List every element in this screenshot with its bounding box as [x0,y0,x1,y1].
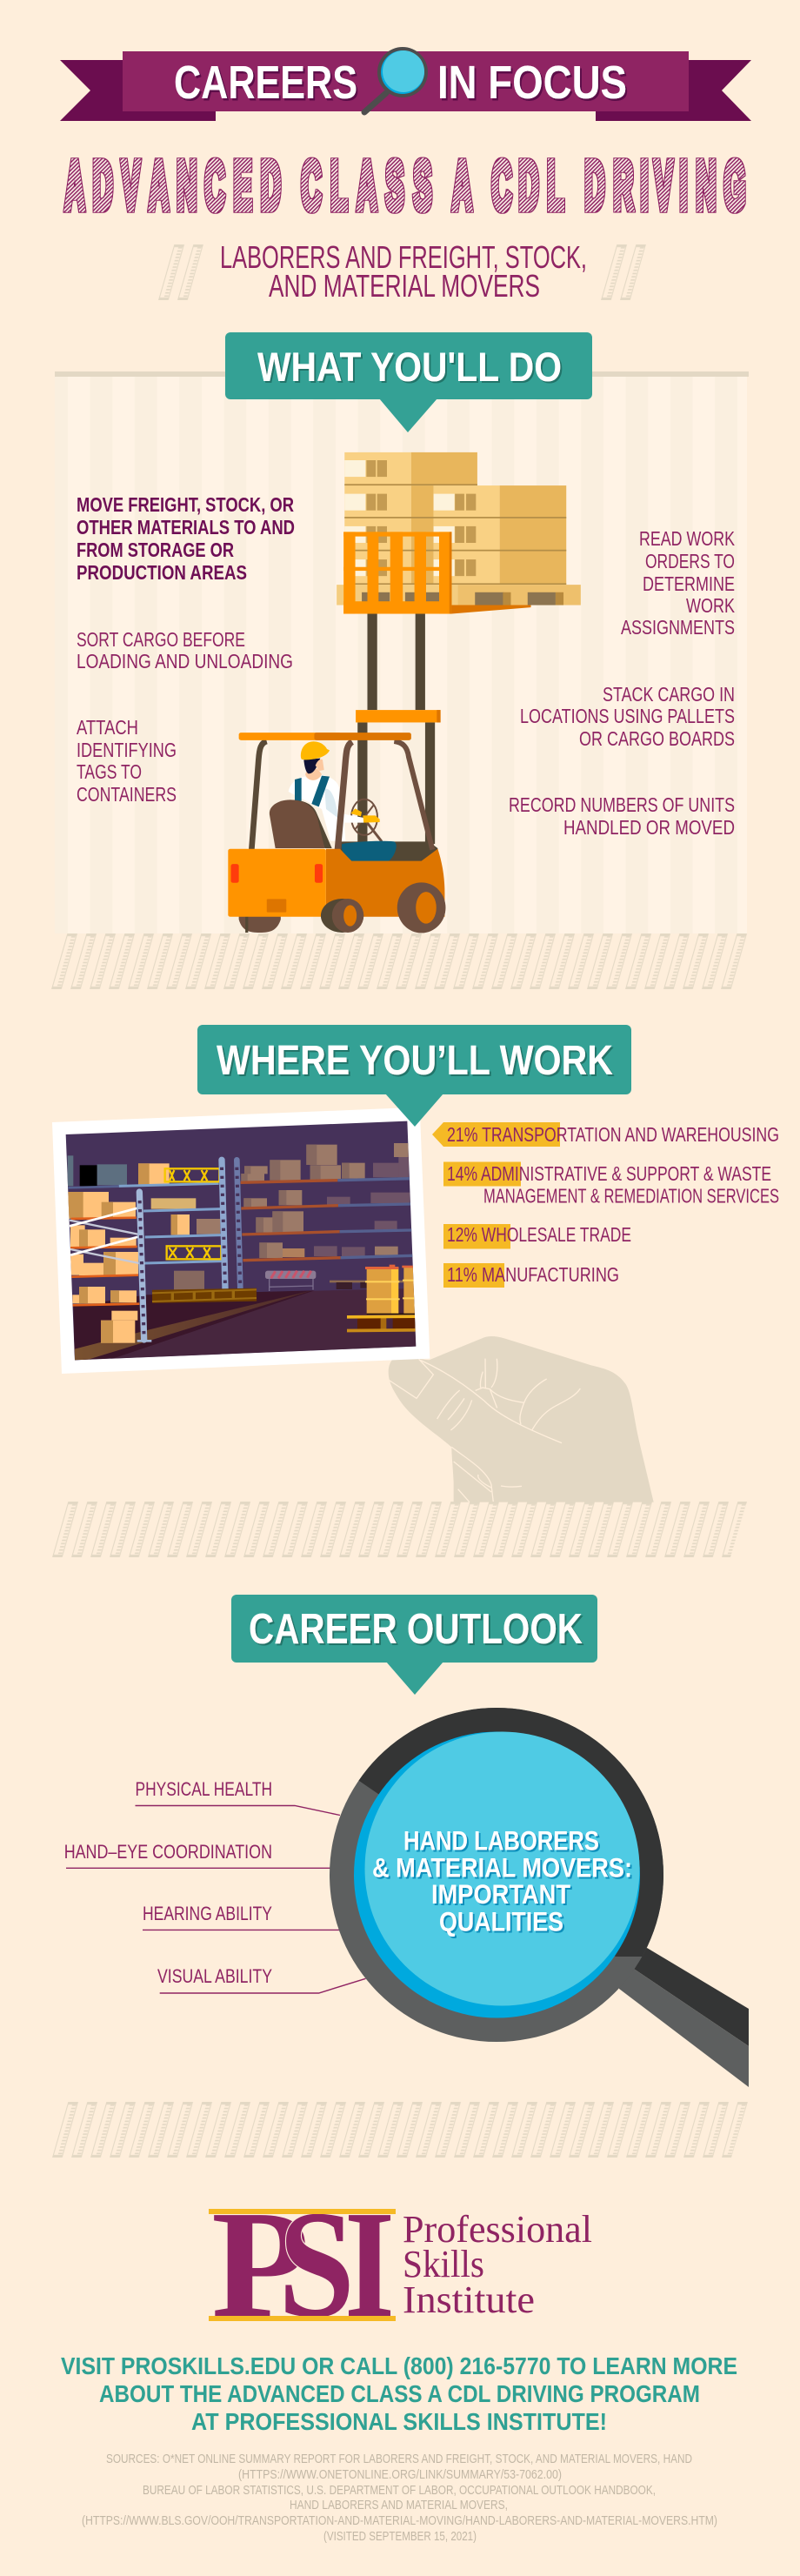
ring [330,1708,663,2042]
sources: (HTTPS://WWW.ONETONLINE.ORG/LINK/SUMMARY/53-7062.00) [238,2468,562,2482]
fork and carriage [451,606,531,614]
logo: professional skills institute [209,2179,592,2350]
logo mark: PSI: I [344,2179,395,2350]
icon: magnifying glass [364,47,428,112]
heading: in focus: IN FOCUS [437,57,627,109]
call to action [61,2352,737,2435]
warehouse floor [73,1288,416,1360]
duty: move freight [77,493,295,584]
sources: BUREAU OF LABOR STATISTICS, U.S. DEPARTMENT OF LABOR, OCCUPATIONAL OUTLOOK HANDBOOK, [143,2484,656,2498]
duty: move freight: PRODUCTION AREAS [77,561,247,584]
panel: career outlook [64,1595,749,2087]
duty: stack cargo: LOCATIONS USING PALLETS [520,705,735,727]
lens text: & MATERIAL MOVERS: [372,1853,632,1883]
heading bubble: where you'll work: WHERE YOU’LL WORK [217,1038,613,1084]
duty: read work orders: WORK [686,594,736,617]
duty: move freight: FROM STORAGE OR [77,539,234,561]
body and wheels [228,733,445,933]
call to action: AT PROFESSIONAL SKILLS INSTITUTE! [191,2408,607,2435]
stat: 14% administrative [443,1162,779,1208]
panel: where you'll work [52,1025,779,1502]
duty: attach tags [77,716,177,806]
logo wordmark [403,2208,592,2321]
lens [354,1731,640,2018]
ribbon tail left [60,60,216,121]
lens text: QUALITIES [439,1907,563,1937]
divider two [51,1502,747,1557]
duties left column [77,493,295,806]
duty: sort cargo: LOADING AND UNLOADING [77,650,293,672]
duty: attach tags: IDENTIFYING [77,739,177,761]
duties right column [509,527,736,839]
logo mark: PSI [209,2179,396,2350]
logo wordmark: Professional [403,2208,592,2251]
heading bubble: what you'll do [225,332,592,432]
mast [357,614,435,844]
subtitle text line one: LABORERS AND FREIGHT, STOCK, [220,239,587,275]
duty: record numbers [509,793,735,839]
illustration: hand holding photo [389,1336,654,1502]
heading bubble: career outlook: CAREER OUTLOOK [249,1606,583,1653]
divider one [50,933,748,989]
duty: attach tags: ATTACH [77,716,138,739]
duty: stack cargo: STACK CARGO IN [603,683,735,706]
logo wordmark: Institute [403,2278,535,2321]
lens text: IMPORTANT [431,1879,570,1910]
cab and driver [251,741,437,861]
quality: physical health [136,1778,340,1815]
duty: record numbers: HANDLED OR MOVED [563,816,735,839]
illustration: large magnifying glass [330,1708,749,2087]
duty: sort cargo [77,628,293,672]
duty: read work orders: DETERMINE [643,572,735,595]
sources [82,2452,717,2544]
duty: read work orders [621,527,736,639]
driver [289,775,363,841]
duty: move freight: MOVE FREIGHT, STOCK, OR [77,493,294,516]
ribbon tail right [596,60,751,121]
divider three [51,2102,748,2158]
seat [290,800,332,848]
banner: careers in focus [60,47,751,121]
barrier, pallets and barrels [152,1265,417,1332]
panel: what you'll do [55,332,749,933]
sources: (VISITED SEPTEMBER 15, 2021) [323,2530,477,2544]
lens text: HAND LABORERS [403,1825,599,1857]
right racks [241,1143,412,1261]
slashes left [157,244,203,300]
heading bubble: what you'll do: WHAT YOU'LL DO [257,344,562,390]
duty: read work orders: READ WORK [639,527,736,550]
duty: read work orders: ORDERS TO [645,550,735,572]
quality: physical health: PHYSICAL HEALTH [136,1778,272,1800]
duty: sort cargo: SORT CARGO BEFORE [77,628,245,651]
left racks [68,1155,240,1343]
title: ADVANCED CLASS A CDL DRIVING [65,146,745,224]
steering wheel [351,800,382,841]
duty: stack cargo [520,683,735,750]
boxes and pallet [337,452,581,844]
ribbon main [123,51,689,111]
logo mark: PSI: P [211,2179,310,2350]
stat: 12% wholesale: 12% WHOLESALE TRADE [447,1223,631,1246]
call to action: ABOUT THE ADVANCED CLASS A CDL DRIVING PROGRAM [99,2380,700,2407]
logo mark: PSI: S [278,2179,355,2350]
quality: hearing ability: HEARING ABILITY [143,1903,272,1924]
quality: visual ability: VISUAL ABILITY [157,1965,272,1987]
subtitle text line two: AND MATERIAL MOVERS [269,268,540,304]
heading bubble: career outlook [231,1595,597,1695]
photo: warehouse print [52,1107,430,1374]
duty: move freight: OTHER MATERIALS TO AND [77,516,295,539]
quality: hand-eye coordination: HAND–EYE COORDINATION [64,1841,272,1863]
stat: 12% wholesale [443,1223,631,1249]
duty: attach tags: TAGS TO [77,760,142,783]
duty: record numbers: RECORD NUMBERS OF UNITS [509,793,735,816]
heading: careers: CAREERS [174,57,357,109]
subtitle [157,239,646,304]
slashes right [600,244,646,300]
cage posts [337,742,352,850]
duty: stack cargo: OR CARGO BOARDS [579,727,735,750]
lens text [372,1825,632,1937]
logo wordmark: Skills [403,2243,484,2285]
duty: read work orders: ASSIGNMENTS [621,616,735,639]
striped backdrop [55,371,749,933]
heading bubble: where you'll work [197,1025,631,1127]
duty: attach tags: CONTAINERS [77,783,177,806]
handle [616,1948,749,2046]
sources: HAND LABORERS AND MATERIAL MOVERS, [290,2499,508,2512]
illustration: forklift with pallet [228,452,581,933]
stat: 11% manufacturing: 11% MANUFACTURING [447,1263,619,1286]
quality: visual ability [157,1965,365,1993]
